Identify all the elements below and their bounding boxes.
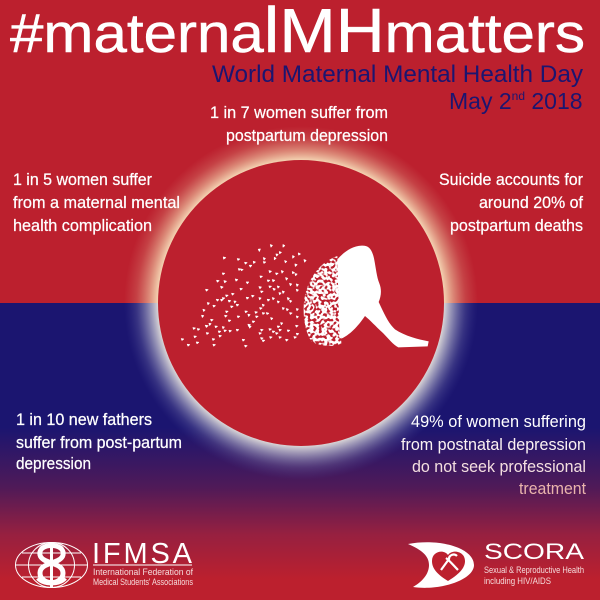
stat: 1 in 5 women: from a maternal mental [13,193,180,212]
stat: suicide: Suicide accounts for [439,170,583,189]
dissolving fragments of body [304,256,341,346]
stat: 1 in 5 women: health complication [13,216,152,235]
logo: SCORA [408,539,584,588]
icon: SCORA emblem with heart and ribbon [408,542,474,588]
icon: IFMSA globe [16,542,88,588]
IFMSA wordmark: IFMSA [92,538,193,570]
subtitle: date: nd [512,89,525,103]
silhouette body [337,246,429,347]
background: red upper half [0,0,600,303]
stat: 1 in 5 women: 1 in 5 women suffer [13,170,152,189]
stat: 1 in 5 women [13,170,180,235]
stat: 49% of women: do not seek professional [412,457,586,476]
stat: new fathers: suffer from post-partum [16,433,182,452]
stat: 49% of women: from postnatal depression [401,435,586,454]
stat: new fathers: depression [16,454,91,473]
logo: IFMSA: Medical Students' Associations [93,577,193,588]
logo: SCORA: including HIV/AIDS [484,576,551,587]
stat: 49% of women [401,412,586,498]
stat: 1 in 7 women [210,103,388,145]
subtitle: date: May 2 [449,88,512,114]
subtitle: date: 2018 [525,88,583,114]
stat: 49% of women: 49% of women suffering [411,412,586,431]
stat: new fathers [16,410,182,473]
logo: IFMSA [16,538,193,588]
IFMSA full name: International Federation of [93,567,193,578]
stat: 49% of women: treatment [519,479,586,498]
stat: new fathers: 1 in 10 new fathers [16,410,152,429]
stat: suicide: around 20% of [479,193,583,212]
background: navy to red lower half [0,303,600,600]
subtitle: event name: World Maternal Mental Health Day [212,61,583,88]
central circle with glow [124,126,478,480]
illustration: dissolving seated woman [181,245,429,347]
stat: suicide: postpartum deaths [450,216,583,235]
stat: 1 in 7 women: postpartum depression [226,126,388,145]
stat: 1 in 7 women: 1 in 7 women suffer from [210,103,388,122]
SCORA wordmark: SCORA [484,539,584,564]
stat: suicide [439,170,583,235]
scattered particles [181,245,306,347]
